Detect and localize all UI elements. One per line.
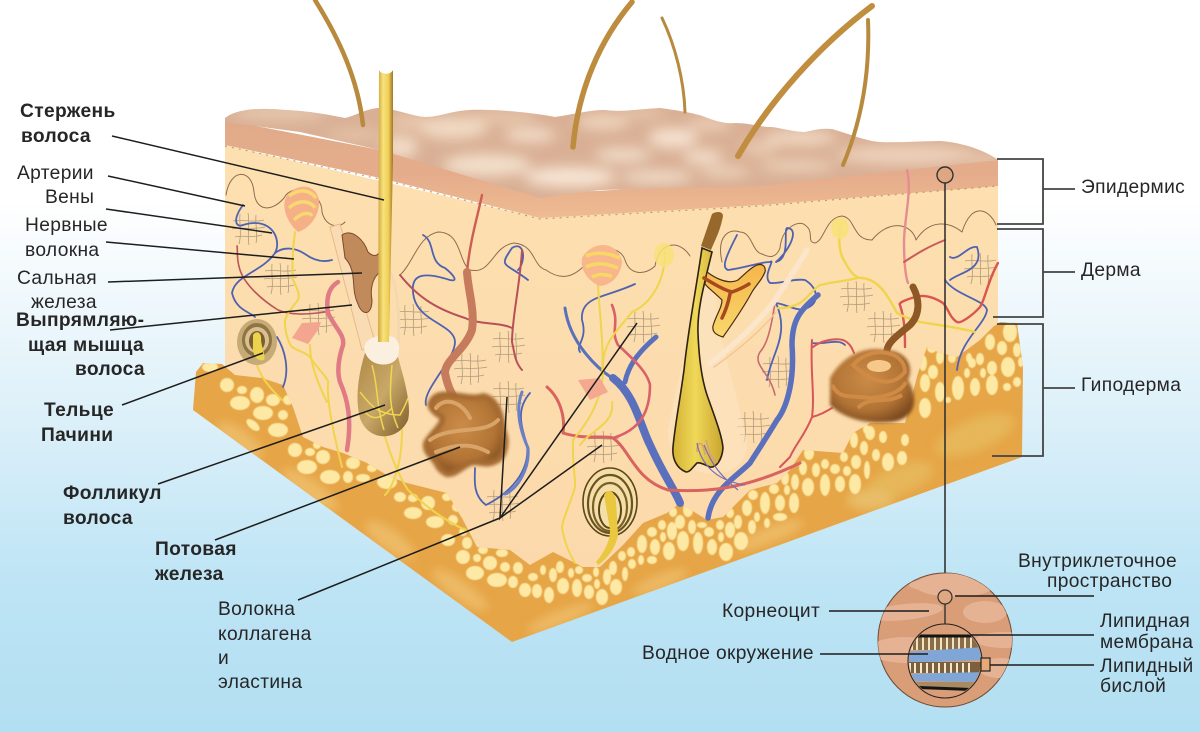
label: lipid membrane: Липидная (1100, 611, 1190, 632)
left hair follicle sheath and muscle (330, 224, 409, 436)
label: lipid membrane (1100, 611, 1193, 653)
label: lipid bilayer: бислой (1100, 676, 1166, 697)
label: hair shaft: Стержень (20, 101, 116, 122)
hypodermis: fat layer (190, 320, 1030, 650)
callout: intercellular space circle (938, 590, 952, 604)
large blue veins (505, 295, 818, 518)
label: collagen and elastin fibers (218, 599, 312, 693)
label: hair shaft: волоса (21, 126, 91, 147)
fat mottling (211, 404, 1020, 638)
hair 4 (738, 6, 872, 156)
left Pacinian corpuscle (237, 319, 277, 365)
label: intercellular space (1018, 551, 1177, 592)
label: hair follicle (63, 483, 162, 529)
label: sebaceous gland: железа (31, 292, 97, 313)
left pink glomus (292, 322, 321, 344)
skin surface with bumps (225, 108, 998, 198)
label: arrector pili muscle: щая мышца (28, 335, 144, 356)
label: Pacinian corpuscle: Пачини (41, 425, 113, 446)
label: sebaceous gland (17, 268, 97, 313)
label: dermis: Дерма (1081, 260, 1141, 281)
hair 3 (662, 18, 685, 112)
label: lipid bilayer (1100, 656, 1194, 697)
left round papilla (284, 187, 319, 232)
yellow papillae (654, 217, 849, 267)
label: sebaceous gland: Сальная (17, 268, 97, 289)
label: lipid bilayer: Липидный (1100, 656, 1194, 677)
left sebaceous gland (342, 233, 380, 313)
bracket: epidermis (997, 159, 1075, 224)
label: hair follicle: Фолликул (63, 483, 162, 504)
right sebaceous gland (704, 265, 765, 337)
label: veins: Вены (45, 187, 94, 208)
hair 5 (843, 20, 868, 165)
right ball papilla (582, 245, 622, 286)
label: collagen and elastin fibers: и (218, 648, 229, 669)
label: collagen and elastin fibers: эластина (218, 672, 302, 693)
central Pacinian corpuscle (583, 468, 637, 565)
callout: lipid detail (905, 624, 985, 698)
capillary nets (232, 213, 997, 521)
fat cells (202, 322, 1024, 605)
label: intercellular space: Внутриклеточное (1018, 551, 1177, 572)
label: corneocyte: Корнеоцит (722, 601, 820, 622)
hair strands (315, 0, 872, 165)
central pink glomus (578, 378, 608, 400)
label: nerve fibers (25, 215, 108, 261)
blue veins (232, 205, 987, 505)
left sweat gland (426, 272, 505, 474)
callout: lipid bilayer marker (981, 658, 990, 671)
label: hair follicle: волоса (63, 508, 133, 529)
right arrector muscle (710, 250, 807, 367)
label: aqueous environment: Водное окружение (642, 643, 814, 664)
left hair shaft (378, 70, 393, 342)
label: epidermis: Эпидермис (1081, 177, 1185, 198)
label: sweat gland: Потовая (155, 539, 237, 560)
label: arrector pili muscle: волоса (75, 359, 145, 380)
label: intercellular space: пространство (1047, 571, 1172, 592)
magnifier connector (937, 167, 953, 574)
epidermis band (225, 120, 998, 218)
right sweat gland (830, 287, 918, 423)
callout: stratum corneum magnified (878, 572, 1012, 708)
label: Pacinian corpuscle (41, 400, 114, 446)
label: arrector pili muscle (16, 310, 145, 380)
label: hair shaft (20, 101, 116, 147)
leader lines (106, 136, 1094, 665)
label: collagen and elastin fibers: коллагена (218, 624, 312, 645)
hair 1 (315, 0, 363, 125)
skin block (190, 70, 1030, 650)
label: hypodermis: Гиподерма (1081, 375, 1181, 396)
right hair follicle (668, 212, 747, 490)
label: Pacinian corpuscle: Тельце (44, 400, 114, 421)
label: collagen and elastin fibers: Волокна (218, 599, 295, 620)
bracket: dermis (993, 229, 1075, 317)
surface highlights (232, 106, 1001, 187)
red arteries (237, 170, 998, 491)
dermis (225, 145, 998, 625)
yellow nerves (256, 228, 975, 563)
label: lipid membrane: мембрана (1100, 632, 1193, 653)
label: nerve fibers: волокна (25, 240, 99, 261)
bracket: hypodermis (992, 324, 1075, 456)
label: sweat gland: железа (154, 564, 224, 585)
label: sweat gland (154, 539, 237, 585)
hair 2 (573, 2, 632, 147)
papillae outline (226, 174, 996, 276)
label: arrector pili muscle: Выпрямляю- (16, 310, 144, 331)
brackets (992, 159, 1075, 456)
dotted basal line (225, 146, 998, 219)
label: arteries: Артерии (17, 163, 94, 184)
label: nerve fibers: Нервные (25, 215, 108, 236)
